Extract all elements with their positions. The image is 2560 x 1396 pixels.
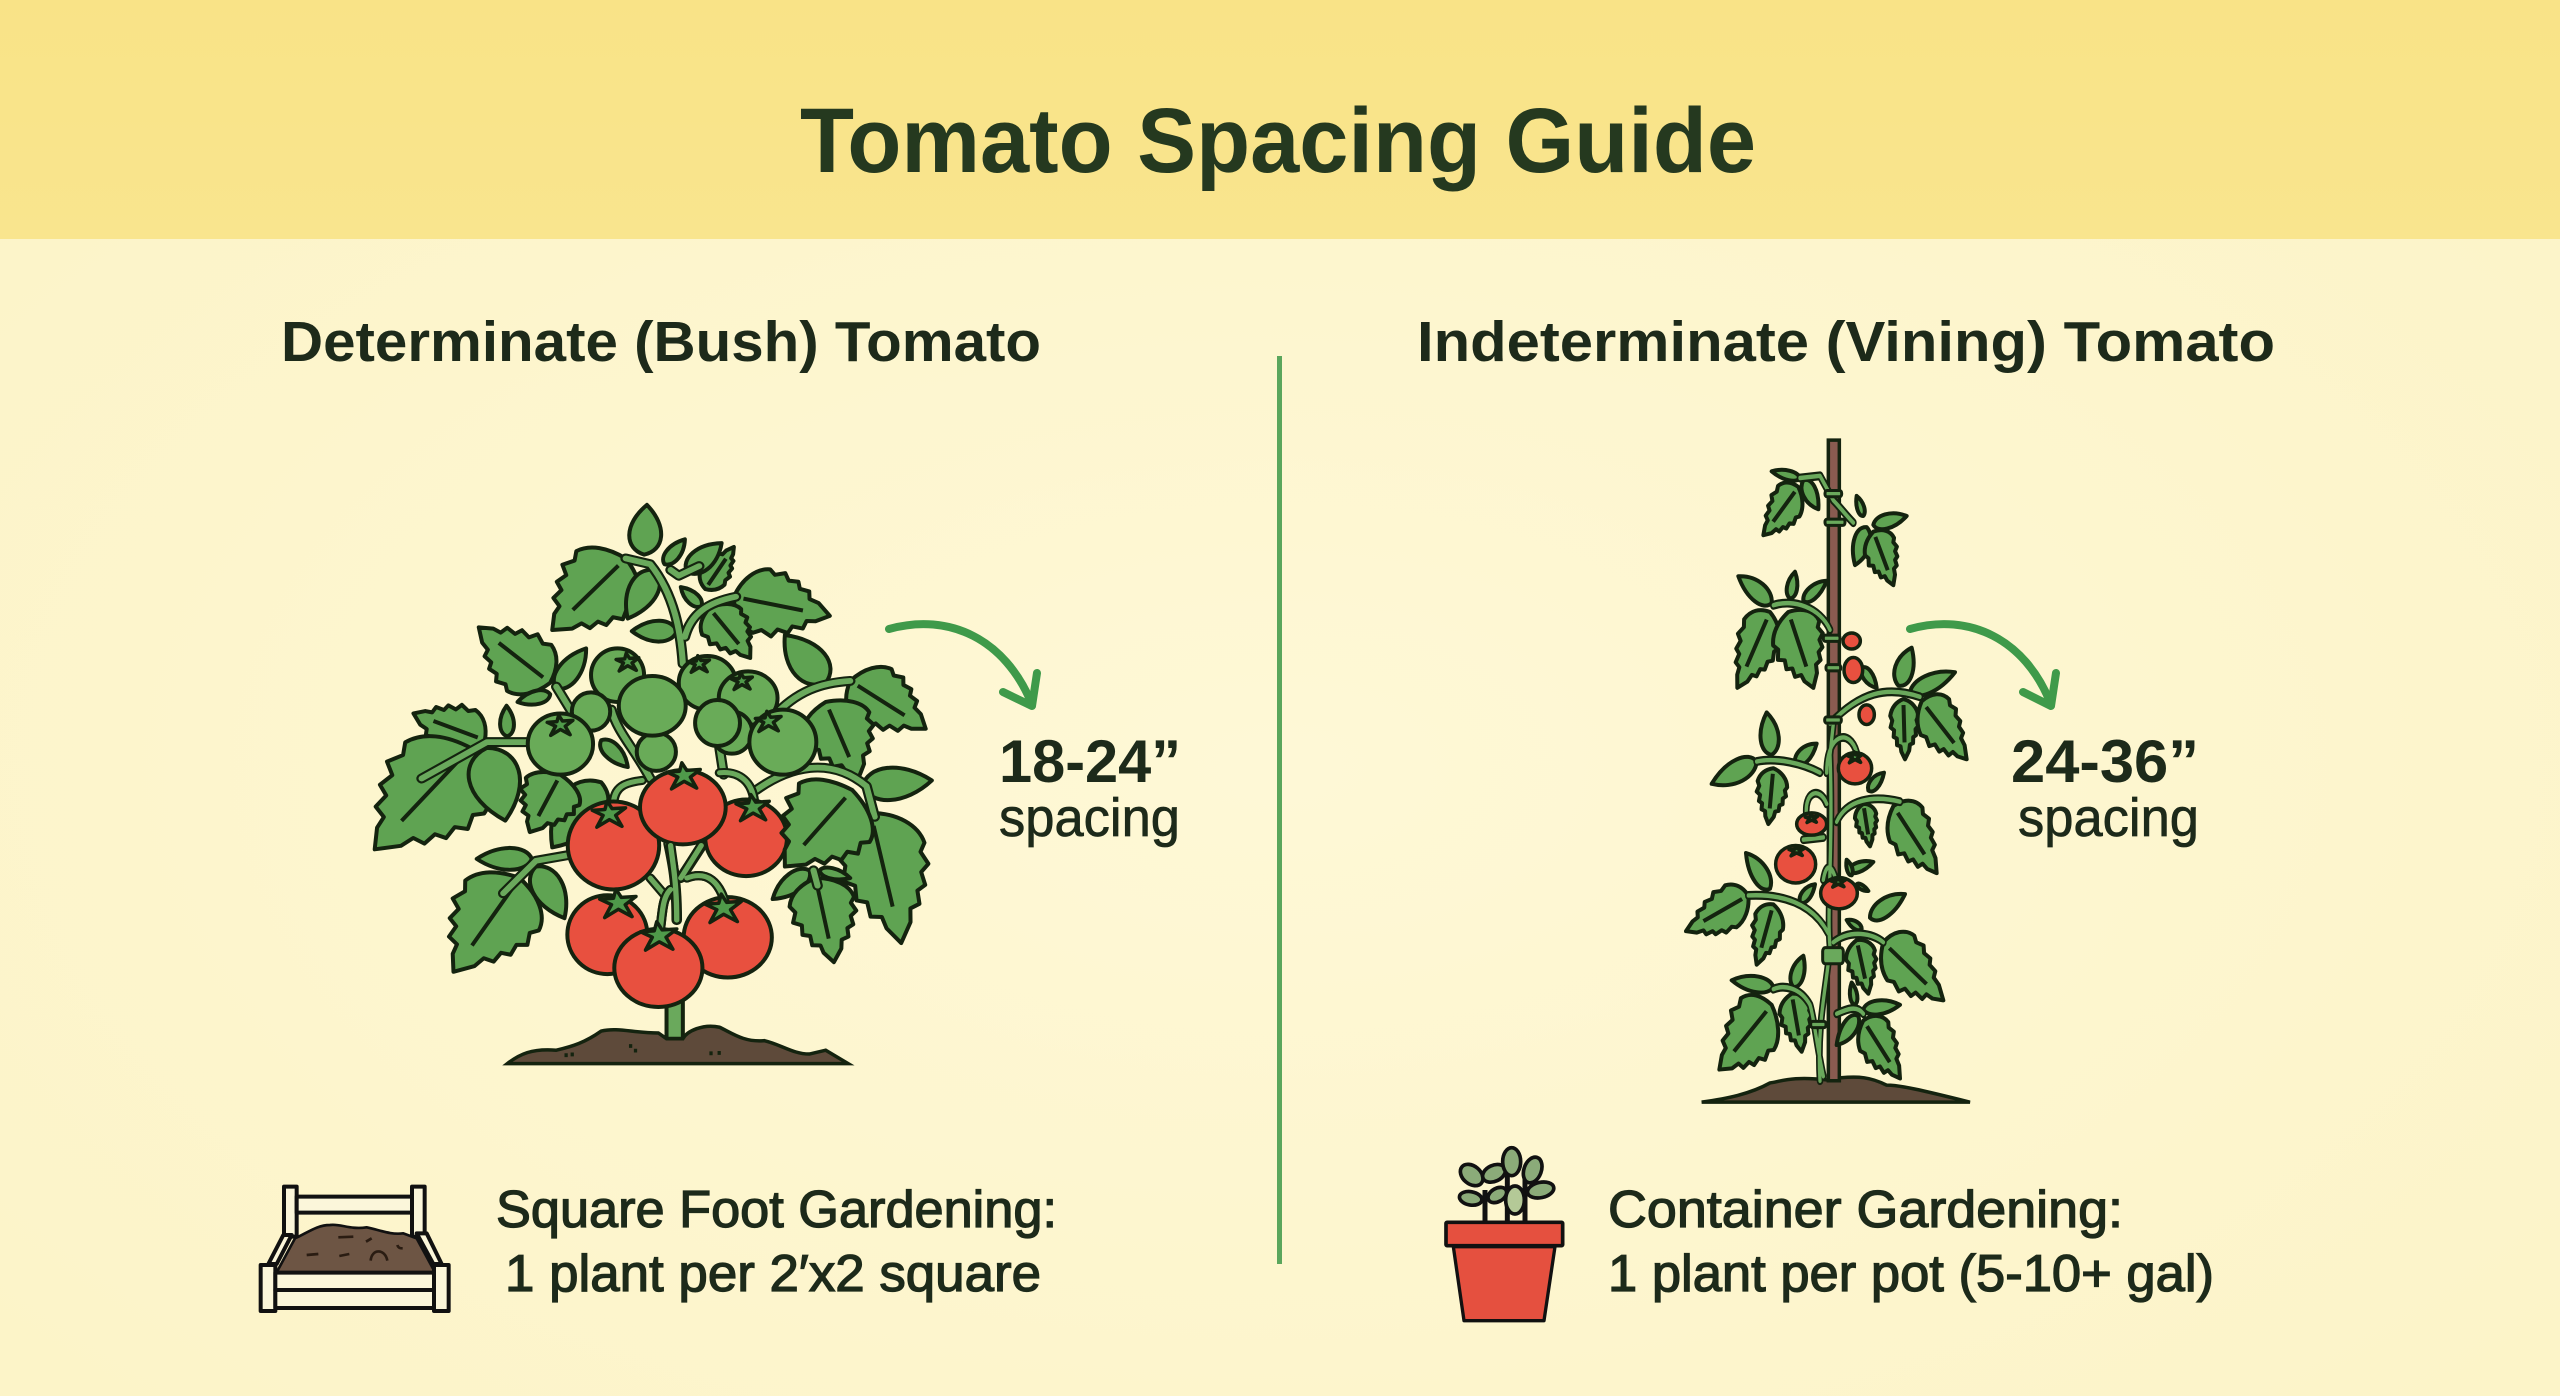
icon: potted seedling [1446,1148,1563,1321]
central stems and calyces [590,620,1041,952]
label: 18-24 spacing [999,728,1181,848]
label: 18-24 spacing: 18-24” [999,728,1181,795]
header band [0,0,2560,239]
label: 24-36 spacing: 24-36” [2011,728,2199,795]
heading: indeterminate: Indeterminate (Vining) Tomato [1417,310,2275,374]
tomatoes on the vine [1776,633,1874,909]
fruit trusses behind red tomatoes [613,773,754,928]
text: container gardening [1608,1181,2214,1303]
main trunk [667,997,683,1039]
title: Tomato Spacing Guide [800,90,1756,192]
front leaf [750,763,890,896]
text: container gardening: Container Gardening: [1608,1181,2123,1239]
heading: determinate: Determinate (Bush) Tomato [281,310,1041,374]
illustration: vining tomato plant [1680,440,1981,1102]
illustration: bush tomato plant [335,504,946,1064]
soil mound [507,1026,848,1064]
label: 18-24 spacing: spacing [999,788,1180,848]
text: square foot gardening: Square Foot Gardening: [496,1181,1057,1239]
back leaves [335,504,946,996]
icon: raised garden bed [261,1187,449,1311]
wooden stake [1828,440,1839,1081]
text: square foot gardening [496,1181,1057,1303]
unripe green tomatoes [528,648,816,775]
stems [422,558,875,920]
leaves [1680,467,1981,1095]
label: 24-36 spacing [2011,728,2199,848]
text: container gardening: 1 plant per pot (5-10+ gal) [1608,1245,2214,1303]
divider line [1277,356,1282,1264]
arrow: determinate spacing [889,624,1037,706]
soil mound [1702,1077,1970,1102]
text: square foot gardening: 1 plant per 2′x2 square [505,1245,1041,1303]
arrow: indeterminate spacing [1910,624,2056,706]
ripe red tomatoes [567,770,787,1007]
vine stems [1748,476,1920,1081]
label: 24-36 spacing: spacing [2018,788,2199,848]
garden ties [1811,491,1845,1028]
